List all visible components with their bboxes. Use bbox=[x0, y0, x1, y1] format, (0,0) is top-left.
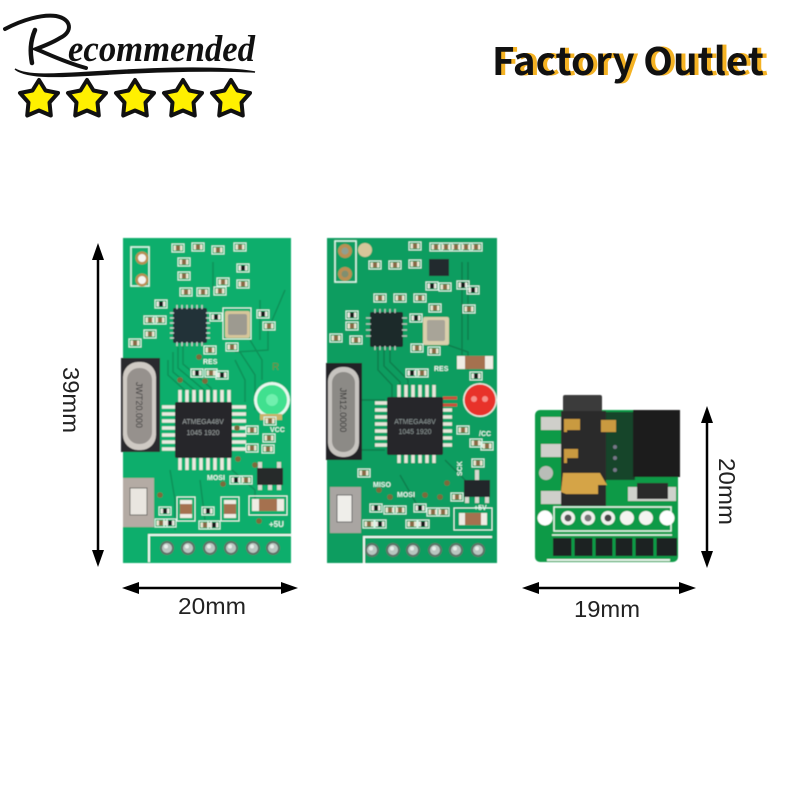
silkscreen labels: VCC bbox=[270, 427, 285, 434]
panel: audio jack adapter module bbox=[535, 395, 680, 562]
main chip: 1045 1920 bbox=[398, 429, 432, 436]
script wordmark: ecommended bbox=[68, 29, 255, 70]
silkscreen labels: MOSI bbox=[397, 492, 415, 499]
dimension: 20mm width, left module bbox=[122, 582, 298, 619]
icon: green LED bbox=[254, 382, 290, 420]
heading: Factory Outlet: Factory Outlet bbox=[492, 31, 764, 86]
regulator bbox=[464, 470, 490, 503]
header pins bbox=[149, 535, 292, 562]
RF chip bbox=[170, 305, 210, 346]
dark area behind jack bbox=[605, 412, 635, 480]
crystal bbox=[326, 363, 362, 460]
dimension: 20mm height bbox=[701, 406, 740, 568]
icon: red LED bbox=[463, 383, 497, 417]
RF chip bbox=[366, 309, 407, 350]
crystal: JWT20.000 bbox=[134, 382, 144, 428]
main chip bbox=[375, 385, 457, 463]
script wordmark bbox=[5, 16, 255, 70]
dimension: 20mm width, left module: 20mm bbox=[178, 593, 246, 619]
traces bbox=[168, 262, 285, 530]
dimension: 19mm width bbox=[522, 582, 696, 622]
main chip: 1045 1920 bbox=[186, 430, 220, 437]
dimension: 19mm width: 19mm bbox=[574, 596, 640, 622]
dimension: 39mm height: 39mm bbox=[58, 367, 84, 433]
silkscreen labels: /CC bbox=[479, 431, 491, 438]
traces bbox=[360, 262, 468, 510]
silkscreen labels: R bbox=[272, 362, 279, 373]
board bbox=[123, 238, 291, 563]
jack body bbox=[561, 411, 617, 506]
header pins bbox=[364, 537, 492, 563]
regulator bbox=[257, 462, 283, 490]
button bbox=[123, 478, 154, 527]
main chip bbox=[162, 390, 246, 470]
crystal bbox=[121, 358, 160, 452]
main chip: ATMEGA48V bbox=[182, 419, 224, 426]
silkscreen labels: SCK bbox=[457, 461, 464, 476]
silkscreen labels bbox=[203, 359, 285, 529]
second small chip bbox=[429, 259, 449, 276]
passive components bbox=[129, 243, 287, 529]
passive components bbox=[330, 242, 493, 530]
holes and pads bbox=[538, 507, 674, 531]
solder lugs bbox=[539, 417, 561, 504]
underline swoosh bbox=[15, 68, 255, 76]
black socket bbox=[633, 410, 680, 477]
oscillator bbox=[223, 308, 251, 339]
button bbox=[330, 487, 361, 533]
silkscreen labels: +5V bbox=[474, 505, 487, 512]
panel: red LED module bbox=[326, 238, 497, 563]
jack barrel bbox=[563, 395, 602, 413]
mounting pads top left bbox=[335, 241, 372, 282]
silkscreen labels: RES bbox=[203, 359, 218, 366]
diode bbox=[628, 483, 676, 501]
board bbox=[535, 410, 678, 562]
mounting pads top left bbox=[131, 247, 149, 286]
dimension: 20mm height: 20mm bbox=[714, 458, 740, 525]
oscillator bbox=[423, 317, 449, 345]
silkscreen labels: +5U bbox=[269, 520, 284, 529]
dimension: 39mm height bbox=[58, 243, 104, 567]
silkscreen labels bbox=[373, 366, 491, 512]
panel: green LED module bbox=[121, 238, 292, 563]
board bbox=[327, 238, 497, 563]
silkscreen labels: MISO bbox=[373, 482, 391, 489]
black pin header bbox=[547, 535, 677, 560]
crystal: JM12.0000 bbox=[338, 388, 348, 432]
main chip: ATMEGA48V bbox=[394, 419, 436, 426]
heading: Factory Outlet: Factory Outlet bbox=[496, 31, 768, 86]
icon: five stars bbox=[20, 80, 250, 116]
logo: Recommended with five stars bbox=[5, 16, 255, 116]
silkscreen labels: RES bbox=[434, 366, 449, 373]
silkscreen labels: MOSI bbox=[207, 475, 225, 482]
